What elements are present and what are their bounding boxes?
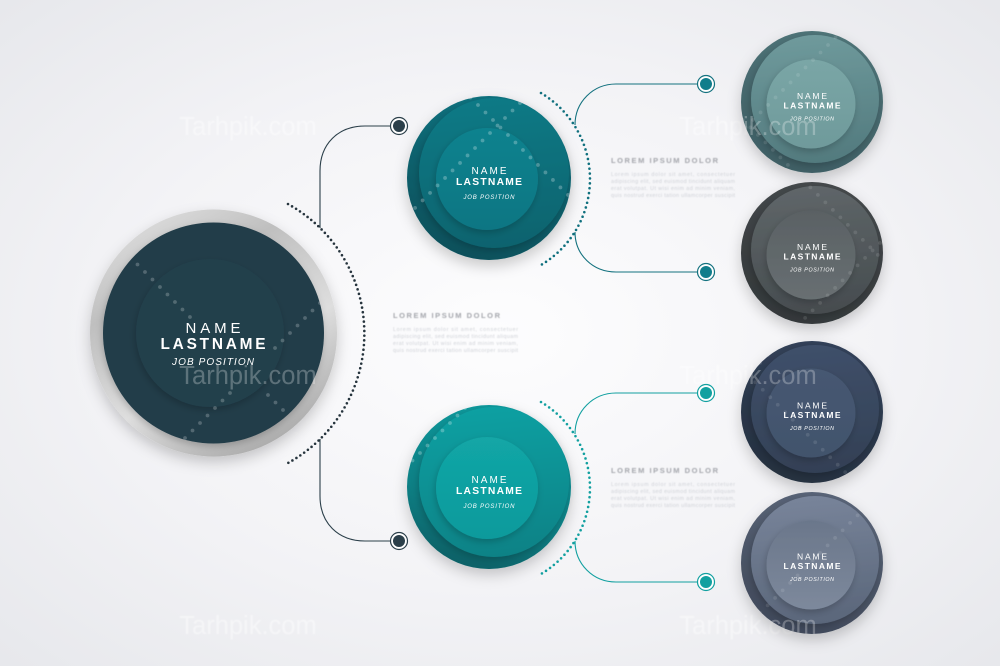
label: person 3: LASTNAME [784,410,841,420]
text block: centre: LOREM IPSUM DOLOR [393,311,501,320]
text block: upper right: LOREM IPSUM DOLOR [611,156,719,165]
label: person 1: JOB POSITION [789,116,834,122]
label: person 1 [784,91,841,122]
label: person 4: LASTNAME [784,561,841,571]
node: top right dot 2 [698,264,714,280]
text block: centre: adipiscing elit, sed euismod tincidunt aliquam [393,334,518,340]
dotted arc: root [288,204,364,463]
text block: lower right [611,466,736,509]
label: upper branch [456,166,522,201]
panel: person circle 3 [741,341,883,483]
text block: upper right: Lorem ipsum dolor sit amet, consectetuer [611,172,735,178]
text block: centre: quis nostrud exerci tation ullamcorper suscipit [393,348,518,354]
label: person 2: NAME [797,242,827,252]
label: upper branch: LASTNAME [456,177,522,188]
text block: upper right: adipiscing elit, sed euismod tincidunt aliquam [611,179,736,185]
node: top right dot 1 [698,76,714,92]
watermarks on background: Tarhpik.com [179,612,317,640]
watermark dots: root [130,257,320,443]
label: person 4: NAME [797,552,827,562]
label: upper branch: NAME [472,166,507,177]
watermarks over circles: Tarhpik.com [679,362,817,390]
text block: lower right: quis nostrud exerci tation ullamcorper suscipit [611,503,736,509]
node: lower left dot [390,532,408,550]
node: bottom right dot 1 [698,384,714,402]
label: person 3: NAME [797,400,827,410]
watermarks on background: Tarhpik.com [679,362,817,390]
label: person 3: JOB POSITION [789,426,834,432]
connector: lower branch to bottom circles [575,393,698,582]
label: person 3 [784,400,841,432]
panel: upper branch circle [407,96,571,260]
text block: upper right: erat volutpat. Ut wisi enim ad minim veniam, [611,186,736,192]
label: person 1: LASTNAME [784,100,841,110]
watermark dots: small circles [743,36,882,613]
label: person 2: LASTNAME [784,252,841,262]
label: root: LASTNAME [160,336,266,353]
dotted arc: upper branch [541,93,590,265]
text block: lower right: erat volutpat. Ut wisi enim ad minim veniam, [611,496,736,502]
text block: lower right: Lorem ipsum dolor sit amet, consectetuer [611,482,735,488]
label: root: NAME [186,320,240,337]
label: person 2: JOB POSITION [789,268,834,274]
text block: lower right: adipiscing elit, sed euismod tincidunt aliquam [611,489,736,495]
watermark dots: teal circles [411,98,570,462]
text block: centre: Lorem ipsum dolor sit amet, consectetuer [393,327,518,333]
text block: centre: erat volutpat. Ut wisi enim ad minim veniam, [393,341,518,347]
label: person 1: NAME [797,91,827,101]
node: bottom right dot 2 [698,574,714,590]
text block: lower right: LOREM IPSUM DOLOR [611,466,719,475]
watermarks on background: Tarhpik.com [179,113,317,141]
label: person 2 [784,242,841,274]
watermarks on background: Tarhpik.com [179,362,317,390]
dotted arc: lower branch [541,402,590,574]
label: lower branch [456,475,522,510]
panel: lower branch circle [407,405,571,569]
watermarks on background: Tarhpik.com [679,612,817,640]
panel: root circle [90,210,337,456]
node: upper left dot [390,118,408,134]
watermarks over circles: Tarhpik.com [679,113,817,141]
panel: person circle 2 [741,182,883,324]
label: upper branch: JOB POSITION [462,195,515,201]
label: lower branch: NAME [472,475,507,486]
watermarks over circles: Tarhpik.com [679,612,817,640]
panel: person circle 1 [741,31,883,173]
text block: upper right: quis nostrud exerci tation ullamcorper suscipit [611,193,736,199]
connector: upper branch to top circles [575,84,698,272]
label: root: JOB POSITION [171,357,255,368]
connector: root to upper branch [320,126,391,228]
watermarks on background [179,113,817,640]
label: person 4: JOB POSITION [789,577,834,583]
watermarks on background: Tarhpik.com [679,113,817,141]
label: lower branch: JOB POSITION [462,504,515,510]
watermarks over circles: Tarhpik.com [179,362,317,390]
text block: upper right [611,156,736,199]
connector: root to lower branch [320,439,391,541]
panel: person circle 4 [741,492,883,634]
label: root [160,320,266,368]
label: lower branch: LASTNAME [456,486,522,497]
label: person 4 [784,552,841,583]
text block: centre [393,311,518,354]
watermarks over circles [179,113,817,640]
